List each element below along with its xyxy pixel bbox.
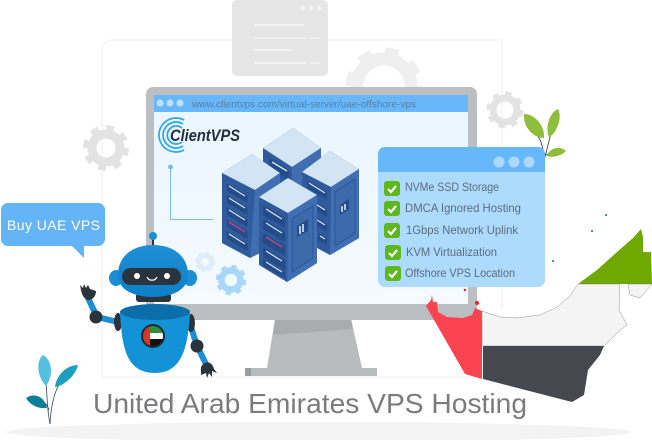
ground shadow [6, 422, 630, 440]
server: back [263, 128, 321, 195]
robot hands [80, 284, 96, 300]
robot neck [136, 293, 171, 302]
icon: large background gear [351, 53, 417, 119]
address bar url: www.clientvps.com/virtual-server/uae-offshore-vps [191, 100, 416, 110]
feature: NVMe SSD Storage [384, 180, 499, 196]
robot head [118, 245, 188, 297]
icon: pale blue gear [196, 254, 214, 270]
feature: Offshore VPS Location: Offshore VPS Location [405, 266, 515, 280]
feature: 1Gbps Network Uplink: 1Gbps Network Uplink [406, 223, 519, 237]
server: left [222, 154, 280, 258]
icon: left grey gear [86, 128, 126, 168]
server: right [302, 151, 359, 255]
feature: KVM Virtualization: KVM Virtualization [406, 245, 497, 259]
robot [80, 232, 217, 378]
robot arms [88, 298, 118, 322]
browser dots [156, 100, 184, 106]
plant: left teal [26, 355, 78, 424]
address bar [154, 95, 468, 112]
feature: DMCA Ignored Hosting: DMCA Ignored Hosting [405, 201, 521, 215]
robot visor [122, 268, 181, 285]
window dots [494, 156, 534, 168]
icon: right grey gear [489, 94, 521, 126]
panel: features [378, 147, 545, 287]
background window card [232, 0, 328, 76]
plant: right green [524, 109, 566, 157]
robot body [120, 313, 190, 373]
connector line [168, 164, 213, 220]
robot antenna [152, 238, 154, 247]
logo: ClientVPS: ClientVPS [170, 126, 241, 145]
logo: ClientVPS [159, 118, 241, 152]
speech bubble: Buy UAE VPS [7, 217, 100, 233]
robot chest flag [141, 324, 165, 348]
title: United Arab Emirates VPS Hosting [93, 388, 527, 419]
monitor [146, 87, 477, 320]
icon: blue gear [218, 267, 244, 293]
background frame outline [102, 40, 502, 377]
monitor stand [245, 319, 377, 376]
robot ears [109, 270, 123, 286]
feature: NVMe SSD Storage: NVMe SSD Storage [405, 180, 499, 194]
server: front [259, 178, 317, 282]
screen [154, 95, 468, 304]
map: UAE in flag colours [426, 214, 652, 402]
speech bubble [1, 203, 105, 258]
